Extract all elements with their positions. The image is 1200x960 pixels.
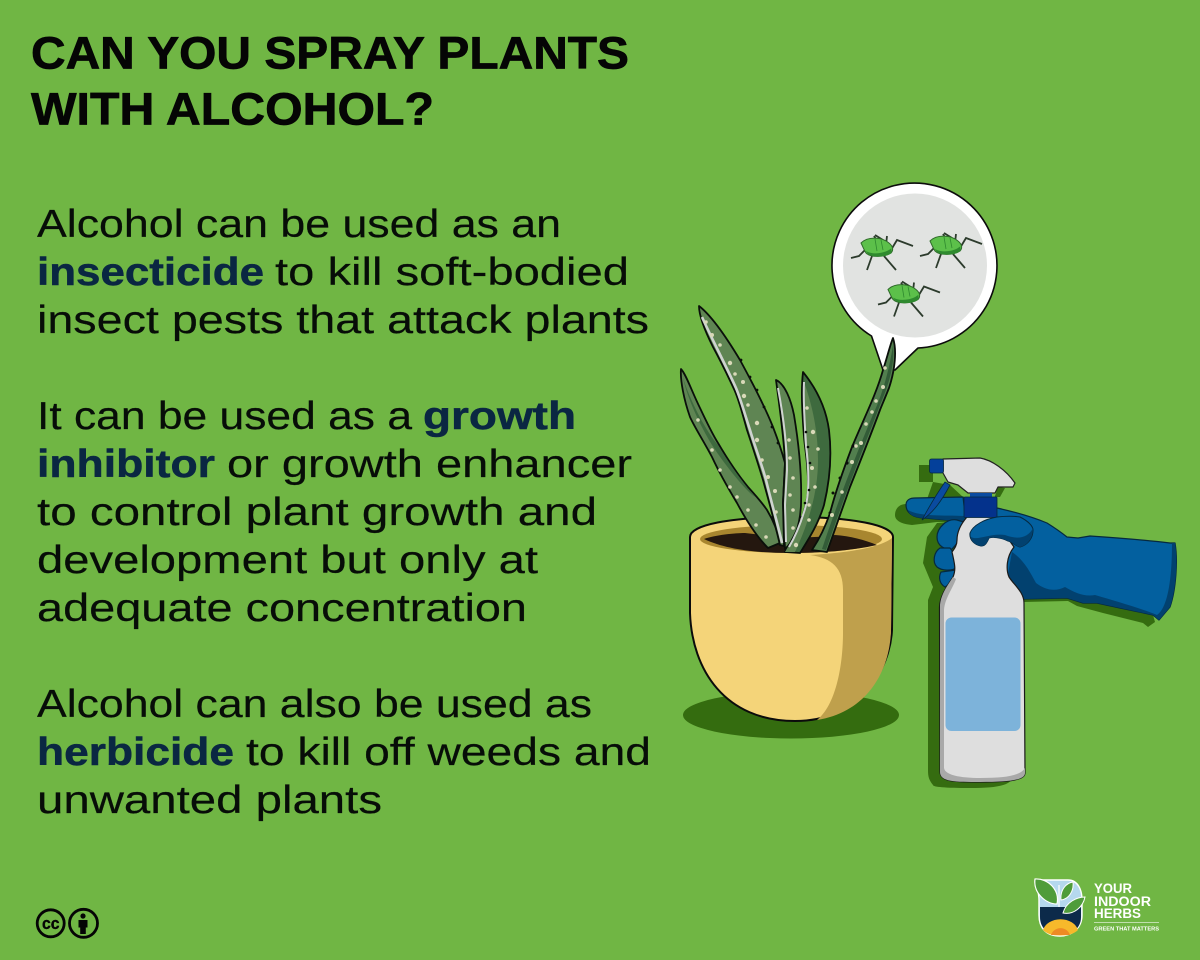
text block: growth inhibitor: or growth enhancer [227, 443, 632, 486]
logo badge [1035, 879, 1085, 936]
soil [704, 533, 877, 553]
logo: Your Indoor Herbs [1035, 879, 1159, 936]
logo wordmark: GREEN THAT MATTERS [1094, 926, 1159, 932]
aloe spots [696, 320, 887, 547]
leaf: small middle [776, 380, 801, 549]
spray bottle [922, 458, 1025, 782]
leaf: tall left [699, 306, 785, 546]
logo wordmark: YOUR [1094, 881, 1132, 896]
text block: herbicide: herbicide [37, 731, 234, 774]
cap [970, 493, 992, 497]
pot shading [810, 538, 892, 720]
title: CAN YOU SPRAY PLANTS [31, 28, 629, 78]
logo wordmark: INDOOR [1094, 894, 1151, 909]
icon: aphid 2 [920, 233, 982, 268]
text block: growth inhibitor: growth [423, 395, 576, 438]
pot shadow [683, 692, 899, 738]
glove shading [1005, 543, 1176, 620]
text block: growth inhibitor: It can be used as a [37, 395, 412, 438]
text block: growth inhibitor: adequate concentration [37, 587, 527, 630]
aloe plant [681, 306, 895, 553]
icon: aphid 1 [851, 235, 913, 270]
leaf: centre [785, 372, 830, 553]
text block: herbicide: to kill off weeds and [246, 731, 651, 774]
pot opening [700, 525, 882, 553]
speech bubble with aphids [832, 183, 997, 370]
bottle body [940, 517, 1025, 782]
glove: hand, cuff and fingers behind bottle [906, 497, 1176, 620]
leaf: right [812, 338, 895, 552]
index finger [906, 497, 966, 522]
text block: herbicide: Alcohol can also be used as [37, 683, 592, 726]
hand and cuff [985, 508, 1176, 620]
glove thumb over bottle [970, 516, 1033, 547]
logo wordmark: HERBS [1094, 906, 1141, 921]
leaf: far left [681, 369, 780, 548]
text block: insecticide: to kill soft-bodied [275, 251, 629, 294]
text block: herbicide: unwanted plants [37, 779, 382, 822]
text block: growth inhibitor: development but only at [37, 539, 538, 582]
text block: growth inhibitor: to control plant growth and [37, 491, 597, 534]
logo wordmark [1094, 881, 1159, 932]
nozzle [930, 459, 944, 473]
text block: insecticide: insecticide [37, 251, 264, 294]
bottle label [946, 618, 1020, 731]
text block: growth inhibitor: inhibitor [37, 443, 215, 486]
licence icons: CC BY: cc [42, 914, 60, 933]
text block: growth inhibitor [37, 395, 632, 630]
pot [690, 517, 893, 721]
sprayer head [943, 458, 1015, 493]
title: WITH ALCOHOL? [31, 84, 434, 134]
text block: insecticide: insect pests that attack plants [37, 299, 649, 342]
leaf spines [740, 359, 855, 514]
text block: insecticide: Alcohol can be used as an [37, 203, 561, 246]
title [31, 28, 629, 134]
licence icons: CC BY [37, 909, 98, 937]
spray bottle and glove shadow [895, 465, 1155, 788]
icon: aphid 3 [878, 282, 940, 316]
trigger [922, 482, 950, 520]
lower fingers [937, 520, 967, 549]
text block: herbicide [37, 683, 651, 822]
text block: insecticide [37, 203, 649, 342]
